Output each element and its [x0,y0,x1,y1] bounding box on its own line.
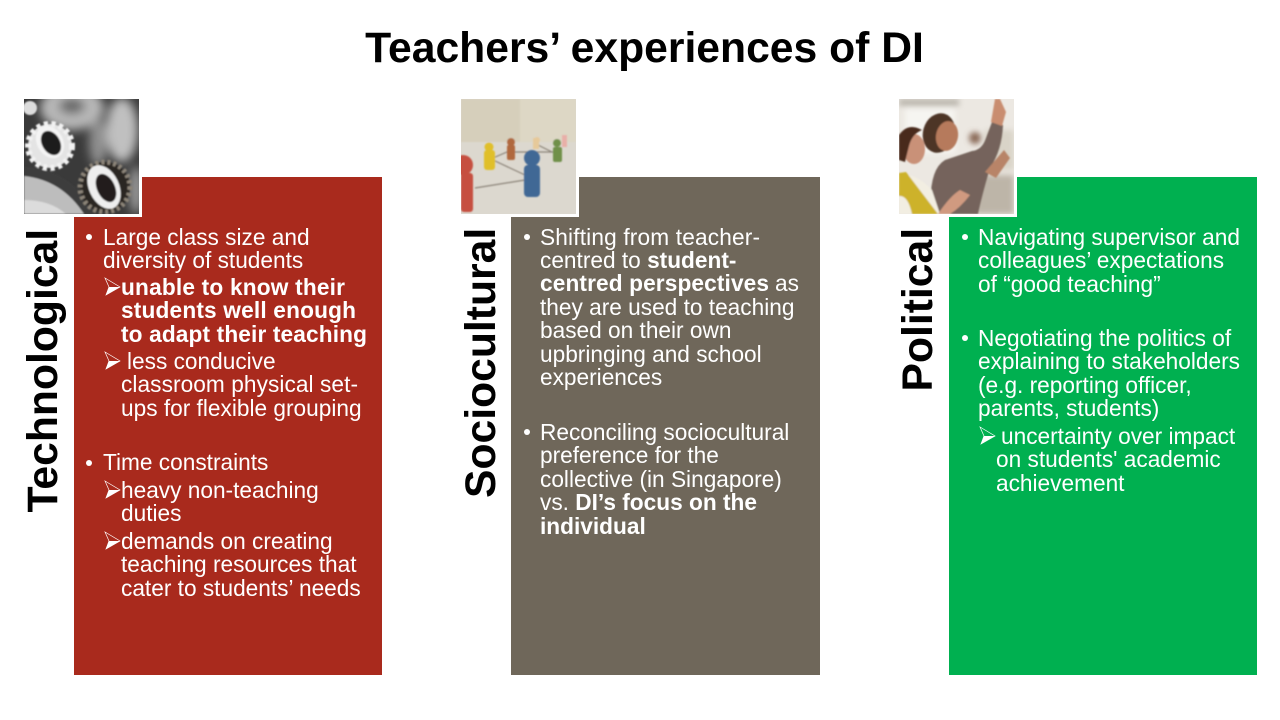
text: technological points: unable to know their [121,274,345,300]
text: political points: achievement [996,470,1125,496]
text: political points: explaining to stakeholders [978,348,1240,374]
text: sociocultural points: upbringing and school [540,341,762,367]
text: sociocultural points [524,224,799,539]
text: technological points: classroom physical set- [121,371,358,397]
text: technological points: ups for flexible grouping [121,395,362,421]
text: sociocultural points: collective (in Singapore) [540,466,782,492]
title: Teachers’ experiences of DI [365,24,924,72]
text: technological points: Time constraints [103,449,268,475]
text: technological points: less conducive [127,348,276,374]
text: technological points: heavy non-teaching [121,477,319,503]
text: political points: colleagues’ expectations [978,247,1224,273]
panel background: political [949,177,1257,675]
text: political points: uncertainty over impact [1001,423,1236,449]
text: political points: of “good teaching” [978,271,1161,297]
text: political points [962,224,1240,496]
text: sociocultural points: centred to student- [540,247,736,273]
text: technological points: Large class size and [103,224,310,250]
panel: political [894,99,1257,675]
text: technological points: diversity of students [103,247,303,273]
text: technological points: duties [121,500,181,526]
text: sociocultural points: vs. DI’s focus on the [540,489,757,515]
text: sociocultural points: experiences [540,364,662,390]
image: gears [24,99,139,214]
text: political points: (e.g. reporting officer, [978,372,1192,398]
text: sociocultural points: as [775,270,799,296]
text: sociocultural points: preference for the [540,442,719,468]
image: teachers at board [899,99,1014,214]
heading: Technological: Technological [19,229,67,512]
text: sociocultural points: based on their own [540,317,731,343]
text: sociocultural points: they are used to teaching [540,294,794,320]
heading: Political: Political [894,228,942,392]
panel: technological [19,86,382,675]
text: technological points: demands on creating [121,528,333,554]
text: political points: Navigating supervisor and [978,224,1240,250]
text: political points: parents, students) [978,395,1159,421]
text: technological points [86,224,367,601]
text: technological points: to adapt their teaching [121,321,367,347]
panel: sociocultural [453,99,820,675]
text: sociocultural points: Reconciling sociocultural [540,419,789,445]
text: sociocultural points: Shifting from teacher- [540,224,760,250]
heading: Sociocultural: Sociocultural [457,228,505,498]
panel background: sociocultural [511,177,820,675]
text: sociocultural points: individual [540,513,646,539]
text: sociocultural points: centred perspectives [540,270,769,296]
text: political points: on students' academic [996,446,1221,472]
text: technological points: cater to students’ needs [121,575,361,601]
text: technological points: students well enough [121,297,356,323]
text: technological points: teaching resources that [121,551,357,577]
image: wooden figures [453,99,576,214]
text: political points: Negotiating the politics of [978,325,1232,351]
panel background: technological [74,177,382,675]
